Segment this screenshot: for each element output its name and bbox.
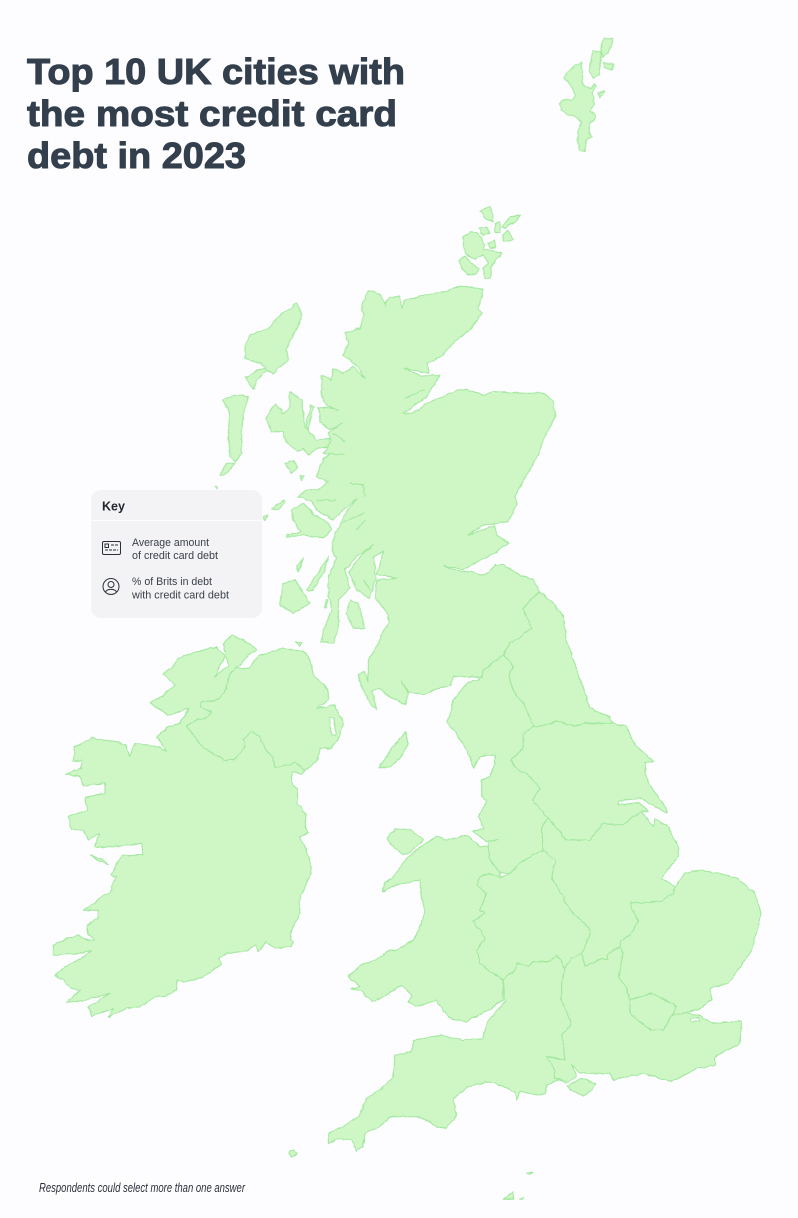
island: Barra xyxy=(220,463,235,475)
island: Eigg xyxy=(300,475,304,480)
island: Orkney Mainland xyxy=(463,232,502,278)
island: Coll xyxy=(272,500,285,510)
island: Islay xyxy=(280,580,310,613)
sea lochs xyxy=(317,298,425,590)
icon: person xyxy=(103,578,119,594)
island: Rathlin xyxy=(295,642,302,647)
island: Shapinsay xyxy=(488,240,496,248)
title: the most credit card xyxy=(27,93,397,134)
region: Yorkshire and the Humber xyxy=(511,721,667,840)
region: North West xyxy=(448,655,548,874)
island: Aran Islands xyxy=(90,855,108,864)
island: Tiree xyxy=(263,515,268,520)
island: Hoy xyxy=(459,256,480,275)
island: Rum xyxy=(285,461,297,473)
map: Shetland xyxy=(559,38,613,152)
map: Northern England xyxy=(378,592,667,874)
island: Whalsay xyxy=(598,91,605,98)
region: Northern Ireland xyxy=(187,648,343,770)
island: Anglesey xyxy=(387,829,423,855)
island: Gigha xyxy=(325,600,327,607)
region: South East xyxy=(547,947,742,1082)
island: Eday xyxy=(495,222,500,233)
footnote: Respondents could select more than one answer xyxy=(39,1180,245,1195)
island: Mull xyxy=(287,503,332,538)
island: Westray xyxy=(480,207,493,222)
island: Fetlar xyxy=(603,62,613,70)
island: Yell xyxy=(589,51,601,79)
region: South West xyxy=(328,955,572,1151)
island: Guernsey xyxy=(503,1192,513,1199)
island: Rousay xyxy=(478,227,489,236)
island: Colonsay xyxy=(297,558,303,572)
title: Top 10 UK cities with xyxy=(27,51,405,92)
region: Scotland mainland xyxy=(298,286,555,709)
island: Isle of Man xyxy=(378,732,408,768)
island: Isle of Wight xyxy=(567,1078,595,1096)
title xyxy=(27,51,405,176)
region: North East xyxy=(503,592,613,727)
region: Wales xyxy=(348,835,503,1022)
key background xyxy=(91,490,262,618)
key heading: Key xyxy=(102,498,126,514)
lough: Strangford xyxy=(329,717,336,735)
map: Scotland and islands xyxy=(215,207,555,709)
region: East of England xyxy=(618,870,760,1015)
key divider xyxy=(91,520,262,521)
island: Sanday xyxy=(502,215,520,228)
title: debt in 2023 xyxy=(27,135,246,176)
island: Jura xyxy=(307,557,328,590)
island: Uists xyxy=(223,395,248,462)
panel: key xyxy=(91,490,262,618)
island: Alderney xyxy=(527,1172,533,1174)
island: Lewis and Harris xyxy=(245,303,302,389)
island: Stronsay xyxy=(503,231,513,242)
island: Skye xyxy=(266,392,330,455)
map: Wales, Midlands and South xyxy=(289,812,760,1200)
key text: percentage of Brits: % of Brits in debt xyxy=(132,576,212,588)
island: Shetland Mainland xyxy=(559,62,597,152)
island: Raasay xyxy=(306,405,313,430)
key text: percentage of Brits: with credit card debt xyxy=(131,590,229,602)
icon: credit card xyxy=(102,542,120,554)
map: Ireland xyxy=(53,635,343,1017)
key text: average amount: of credit card debt xyxy=(132,550,218,562)
island: Arran xyxy=(347,600,365,628)
island: St Kilda xyxy=(215,486,218,489)
island: Isles of Scilly xyxy=(289,1149,297,1158)
region: London xyxy=(630,993,677,1030)
key text: average amount: Average amount xyxy=(132,537,209,549)
island: Sark xyxy=(520,1197,523,1200)
island: Unst xyxy=(601,38,613,57)
region: Republic of Ireland xyxy=(53,635,311,1017)
river: Thames estuary xyxy=(690,1017,699,1022)
region: East Midlands xyxy=(542,812,678,967)
region: West Midlands xyxy=(473,850,590,979)
